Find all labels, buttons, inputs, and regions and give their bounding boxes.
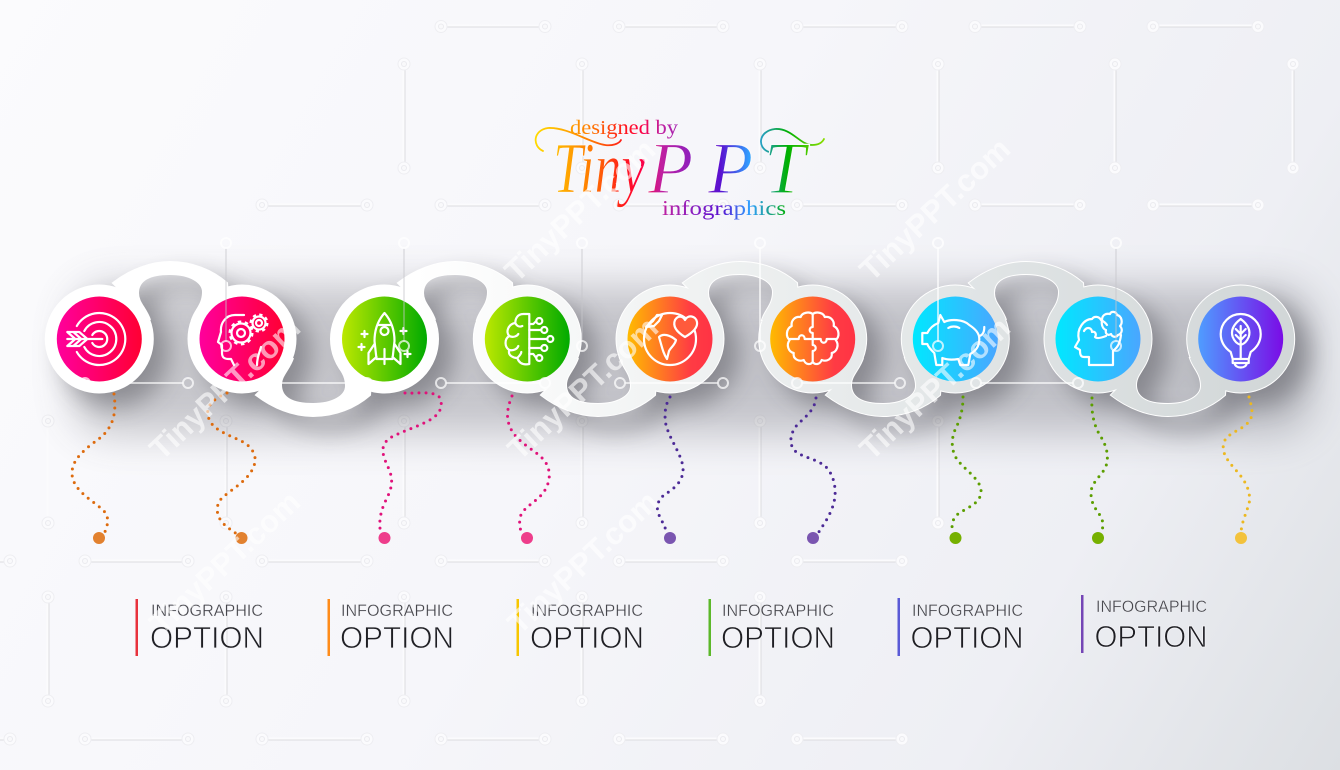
watermarks: TinyPPT.com	[853, 131, 1017, 288]
label 4: OPTION	[721, 620, 835, 655]
icon: brain puzzle	[787, 313, 838, 364]
coloured discs	[57, 296, 1283, 382]
soft drop shadow of the ribbon	[62, 276, 1314, 435]
foreground network lines crossing the ribbon	[80, 238, 1121, 388]
label 6: OPTION	[1094, 619, 1208, 654]
watermarks: TinyPPT.com	[498, 132, 662, 289]
logo: Tiny: Tiny	[553, 128, 645, 208]
label 5: OPTION	[910, 620, 1024, 655]
watermarks	[143, 131, 1017, 641]
watermarks: TinyPPT.com	[501, 484, 665, 641]
label 1: INFOGRAPHIC	[151, 601, 263, 620]
logo: infographics: infographics	[662, 196, 786, 220]
logo: designed by: designed by	[570, 117, 678, 139]
icon: target with arrow	[67, 313, 125, 365]
watermarks: TinyPPT.com	[853, 310, 1017, 467]
label 4	[708, 599, 835, 656]
icon: rocket	[358, 313, 410, 364]
icon: head with puzzle	[1075, 312, 1122, 365]
logo: PPT: T	[764, 128, 810, 210]
label 5	[898, 598, 1024, 656]
dotted connectors with end dots	[72, 393, 1252, 544]
connector 2	[208, 393, 255, 544]
connector 8	[1091, 398, 1107, 544]
icon: piggy bank	[922, 315, 984, 365]
watermarks: TinyPPT.com	[143, 484, 307, 641]
label 4: INFOGRAPHIC	[722, 601, 834, 620]
connector 3	[378, 393, 441, 544]
option labels	[136, 595, 1208, 656]
icon: light bulb with leaf	[1221, 314, 1261, 368]
label 1	[136, 599, 264, 656]
label 2: OPTION	[340, 620, 454, 655]
label 1: OPTION	[150, 620, 264, 655]
icon: brain circuit	[506, 314, 553, 364]
logo: PPT: P	[707, 128, 753, 210]
label 6	[1081, 595, 1208, 654]
connector 7	[950, 397, 981, 544]
connector 6	[791, 398, 835, 544]
connector 9	[1223, 397, 1252, 544]
label 3: OPTION	[530, 620, 644, 655]
label 3: INFOGRAPHIC	[531, 601, 643, 620]
logo flourishes	[536, 128, 824, 152]
connector 1	[72, 394, 115, 544]
label 2: INFOGRAPHIC	[341, 601, 453, 620]
icon: earth with heart	[644, 313, 697, 365]
watermarks: TinyPPT.com	[501, 310, 665, 467]
label 2	[328, 599, 454, 656]
logo	[536, 117, 824, 220]
icon: head with gears	[218, 315, 267, 365]
label 3	[516, 599, 644, 656]
label 6: INFOGRAPHIC	[1096, 597, 1207, 616]
icons	[67, 312, 1261, 368]
watermarks: TinyPPT.com	[143, 310, 307, 467]
label 5: INFOGRAPHIC	[912, 601, 1023, 620]
connected ribbon of nine rings	[46, 262, 1294, 416]
connector 5	[657, 397, 683, 544]
logo: PPT: P	[647, 128, 693, 210]
connector 4	[508, 396, 549, 544]
